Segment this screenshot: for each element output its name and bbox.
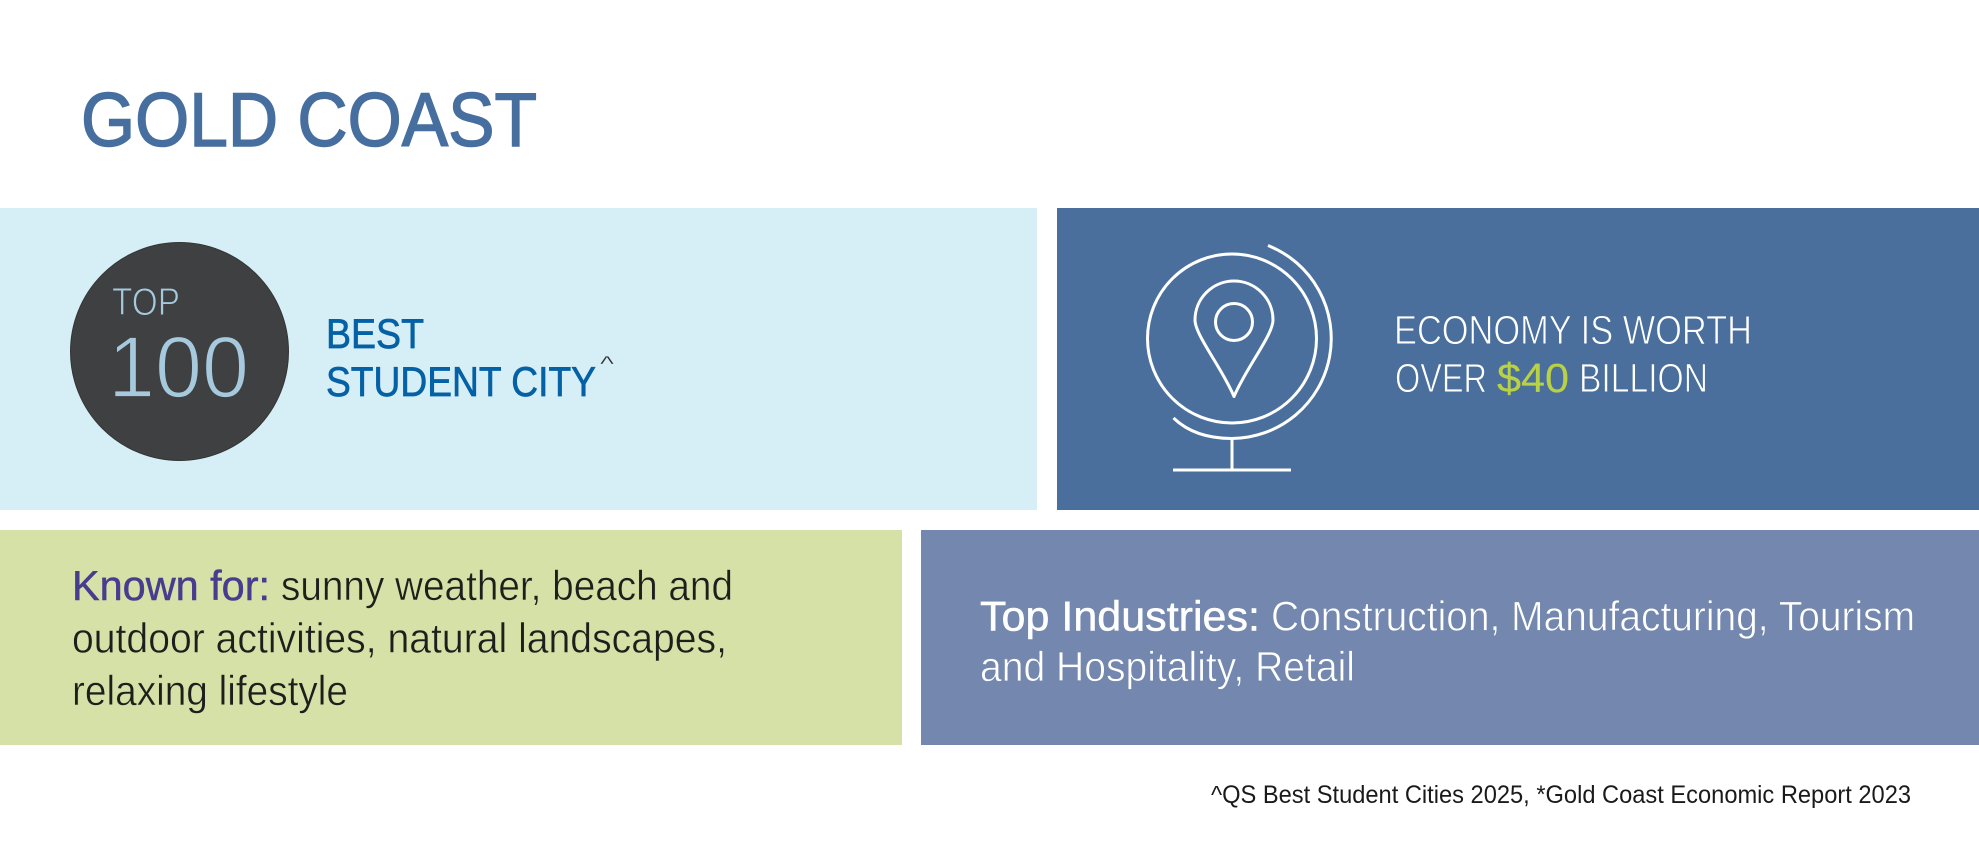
text: top industries: and Hospitality, Retail xyxy=(980,643,1355,690)
panel: economy xyxy=(1057,208,1979,510)
panel: known for xyxy=(0,530,902,745)
badge: top 100: 100 xyxy=(108,319,249,416)
text: known for: relaxing lifestyle xyxy=(72,667,348,714)
text: economy value xyxy=(1394,307,1752,401)
text: best student city: BEST xyxy=(326,310,424,357)
text: known for xyxy=(72,562,733,714)
text: economy value: $40 xyxy=(1497,355,1569,401)
text: economy value: ECONOMY IS WORTH xyxy=(1394,307,1752,353)
icon: globe with location pin xyxy=(1148,246,1331,470)
text: top industries: Construction, Manufacturing, Tourism xyxy=(1271,592,1915,640)
text: known for: outdoor activities, natural landscapes, xyxy=(72,614,727,662)
panel: best student city xyxy=(0,208,1037,510)
text: known for: sunny weather, beach and xyxy=(281,562,733,609)
badge: top 100 xyxy=(70,242,288,460)
footnote: ^QS Best Student Cities 2025, *Gold Coast Economic Report 2023 xyxy=(1211,781,1911,809)
text: best student city: STUDENT CITY xyxy=(326,358,596,405)
text: top industries xyxy=(980,592,1915,690)
text: known for: Known for: xyxy=(72,562,270,609)
panel: top industries xyxy=(921,530,1979,745)
text: top industries: Top Industries: xyxy=(980,592,1260,640)
text: best student city: ^ xyxy=(600,353,614,376)
text: best student city xyxy=(326,310,614,405)
badge: top 100: TOP xyxy=(112,281,180,324)
title: GOLD COAST xyxy=(81,78,537,163)
text: economy value: BILLION xyxy=(1579,355,1708,401)
text: economy value: OVER xyxy=(1395,355,1487,401)
